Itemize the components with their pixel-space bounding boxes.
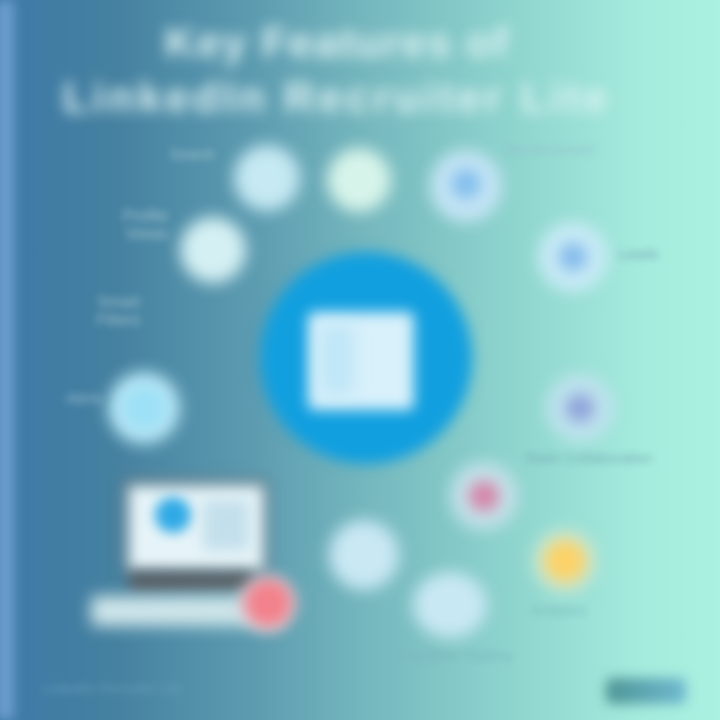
feature icon: right 2 xyxy=(540,369,618,447)
label: top right: Recommended xyxy=(506,142,594,157)
feature icon: left 1 xyxy=(180,217,246,283)
label: top left: Search xyxy=(170,146,214,162)
keyboard xyxy=(129,572,253,592)
halo xyxy=(532,528,598,594)
feature icon: bottom 2 xyxy=(329,520,399,590)
label: left: Alerts xyxy=(66,390,102,406)
feature icon: left 2 xyxy=(98,362,190,454)
central circle icon xyxy=(252,242,482,474)
footer logo xyxy=(606,678,686,704)
glyph xyxy=(122,386,166,430)
glyph xyxy=(543,539,587,583)
window panel xyxy=(308,312,414,410)
feature icon: top 1 xyxy=(234,145,300,211)
notification badge xyxy=(245,580,291,626)
laptop illustration xyxy=(80,473,306,642)
feature icon: right 1 xyxy=(531,216,614,298)
window inner column xyxy=(320,325,354,395)
label: mid left: Smart Filters xyxy=(96,294,140,329)
label: upper left: Profile Views xyxy=(123,208,168,243)
halo xyxy=(450,462,518,530)
glyph xyxy=(566,394,594,422)
label: bottom: Candidate Tracking xyxy=(400,648,512,663)
feature icon: top 3 xyxy=(422,142,510,230)
laptop screen xyxy=(129,486,263,570)
screen side panel xyxy=(203,500,249,550)
glyph xyxy=(469,481,499,511)
halo xyxy=(538,222,608,292)
footer text: LinkedIn Recruiter Lite xyxy=(42,680,182,696)
feature icon: yellow xyxy=(526,522,603,600)
feature icon: bottom 1 xyxy=(413,572,487,638)
title: LinkedIn Recruiter Lite xyxy=(63,74,611,122)
label: right: Leads xyxy=(618,246,659,263)
feature icon: pink xyxy=(442,454,525,538)
label: lower right: Team Collaboration xyxy=(524,450,653,467)
halo xyxy=(546,374,614,442)
glyph xyxy=(451,169,481,199)
blue circle xyxy=(260,252,472,464)
feature icon: top 2 xyxy=(327,148,391,212)
title: Key Features of xyxy=(164,19,510,67)
label: yellow icon: Analytics xyxy=(530,602,586,618)
halo xyxy=(430,150,502,222)
left edge strip xyxy=(0,0,14,720)
title xyxy=(55,18,611,122)
screen icon xyxy=(155,497,191,533)
laptop lid xyxy=(121,476,271,576)
laptop base xyxy=(91,596,281,626)
halo xyxy=(108,372,180,444)
glyph xyxy=(559,243,587,271)
